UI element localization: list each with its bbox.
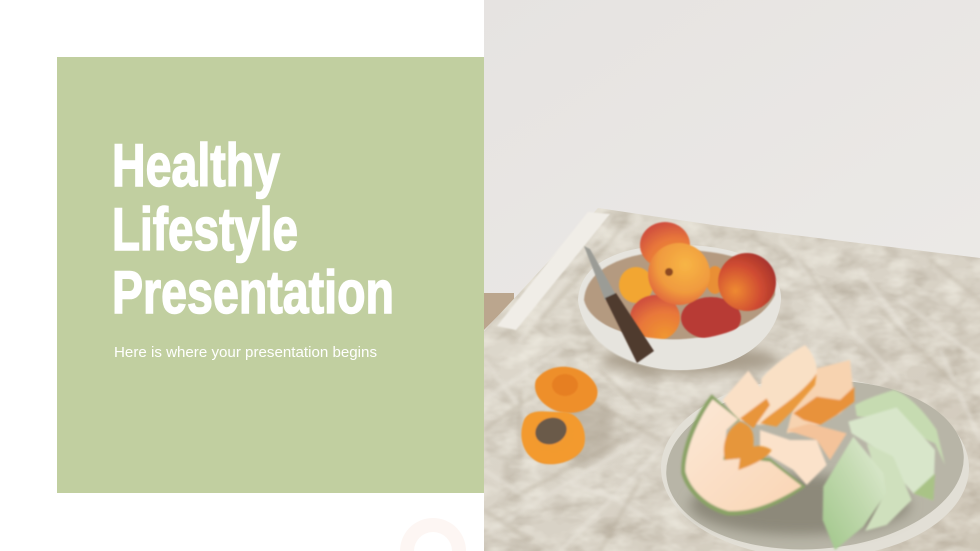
subtitle: Here is where your presentation begins xyxy=(114,345,377,361)
white cloth fold xyxy=(497,212,610,330)
bowl body xyxy=(578,245,781,370)
back orange slice xyxy=(787,360,854,433)
title: Healthy xyxy=(112,132,280,199)
panel: green title card xyxy=(57,57,484,493)
bowl interior xyxy=(584,250,775,340)
apricot shadow xyxy=(570,399,618,462)
fruit in bowl xyxy=(619,222,776,341)
apricot half top xyxy=(535,367,598,413)
knife xyxy=(584,246,654,363)
bowl xyxy=(578,222,781,374)
centre orange wedges xyxy=(723,345,847,485)
apricot half with pit xyxy=(521,411,585,464)
bowl front wall xyxy=(584,319,754,371)
melon slices xyxy=(681,345,945,550)
title: Lifestyle xyxy=(112,196,298,263)
cloth wrinkles xyxy=(484,200,980,551)
plate xyxy=(661,371,969,551)
bowl shadow xyxy=(600,346,780,374)
title: Presentation xyxy=(112,259,394,326)
green melon stack xyxy=(823,407,935,550)
decorative faint arch xyxy=(400,518,466,551)
large melon wedge xyxy=(681,394,806,516)
photo: fruit on a linen-covered table xyxy=(484,0,980,551)
tablecloth xyxy=(484,208,980,551)
green slice back xyxy=(855,390,945,465)
floor strip xyxy=(484,293,514,330)
wall xyxy=(484,0,980,340)
title xyxy=(112,132,394,326)
